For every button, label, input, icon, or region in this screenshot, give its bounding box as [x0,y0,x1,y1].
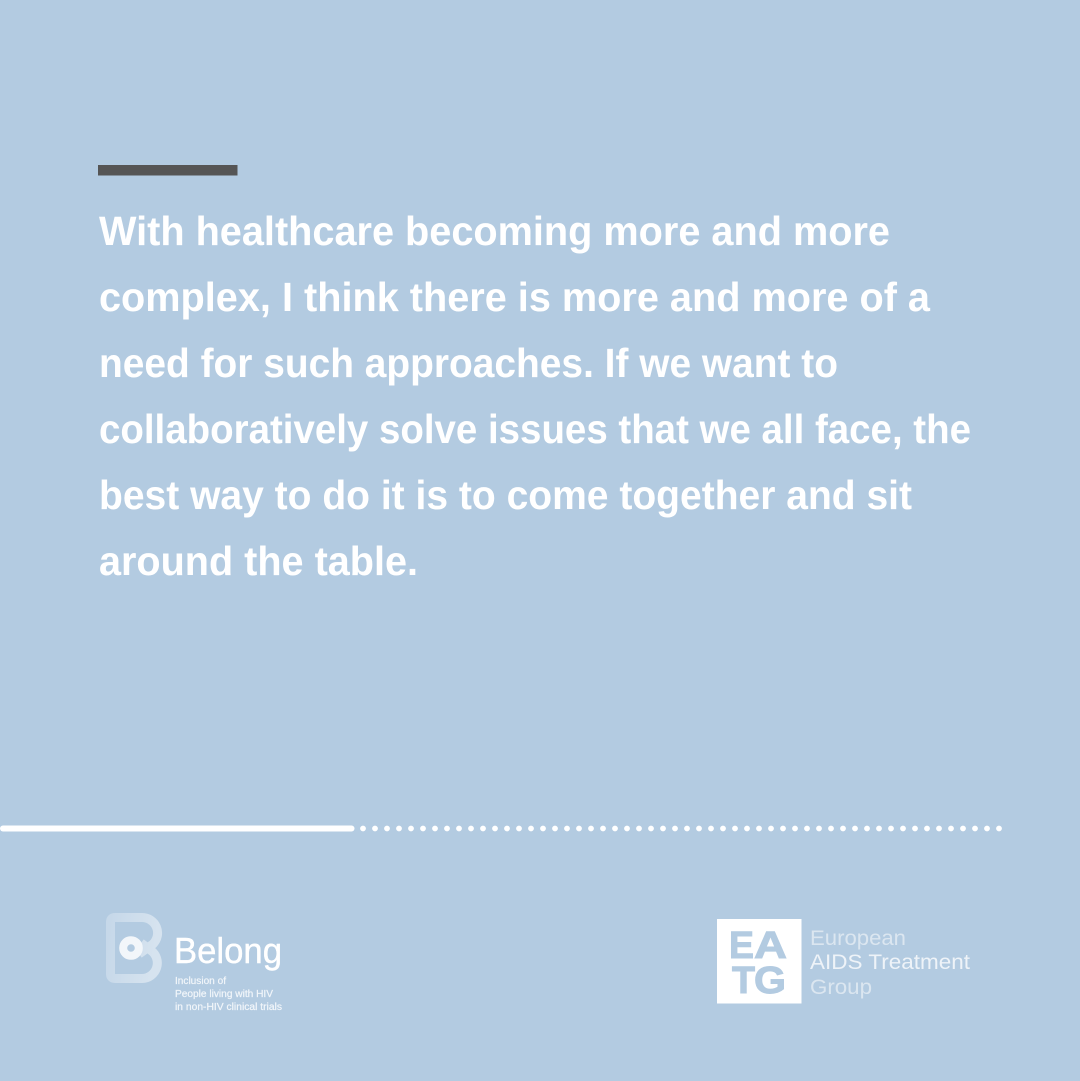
quote text: collaboratively solve issues that we all face, the [99,406,971,452]
quote text [99,208,971,584]
wordmark: European AIDS Treatment Group: Group [810,976,872,999]
tagline [175,976,282,1013]
quote text: best way to do it is to come together and sit [99,472,912,518]
quote text: need for such approaches. If we want to [99,340,838,386]
wordmark: European AIDS Treatment Group [810,927,970,999]
accent bar [98,165,238,176]
wordmark: European AIDS Treatment Group: AIDS Treatment [810,951,970,974]
icon: EATG white square: E [729,925,754,967]
divider: solid line with dots [0,826,1002,832]
quote text: complex, I think there is more and more of a [99,274,931,320]
icon: EATG white square [717,919,802,1004]
tagline: People living with HIV [175,989,273,1000]
logo: Belong [110,917,282,1013]
wordmark: European AIDS Treatment Group: European [810,927,906,950]
icon: EATG white square: G [754,960,786,1002]
logo: EATG [717,919,970,1004]
tagline: Inclusion of [175,976,226,987]
quote text: With healthcare becoming more and more [99,208,890,254]
tagline: in non-HIV clinical trials [175,1002,282,1013]
icon: EATG white square: A [754,925,787,967]
wordmark: Belong: Belong [174,930,282,971]
icon: EATG white square: T [732,960,755,1002]
icon: Belong B mark [110,917,158,978]
quote text: around the table. [99,538,418,584]
